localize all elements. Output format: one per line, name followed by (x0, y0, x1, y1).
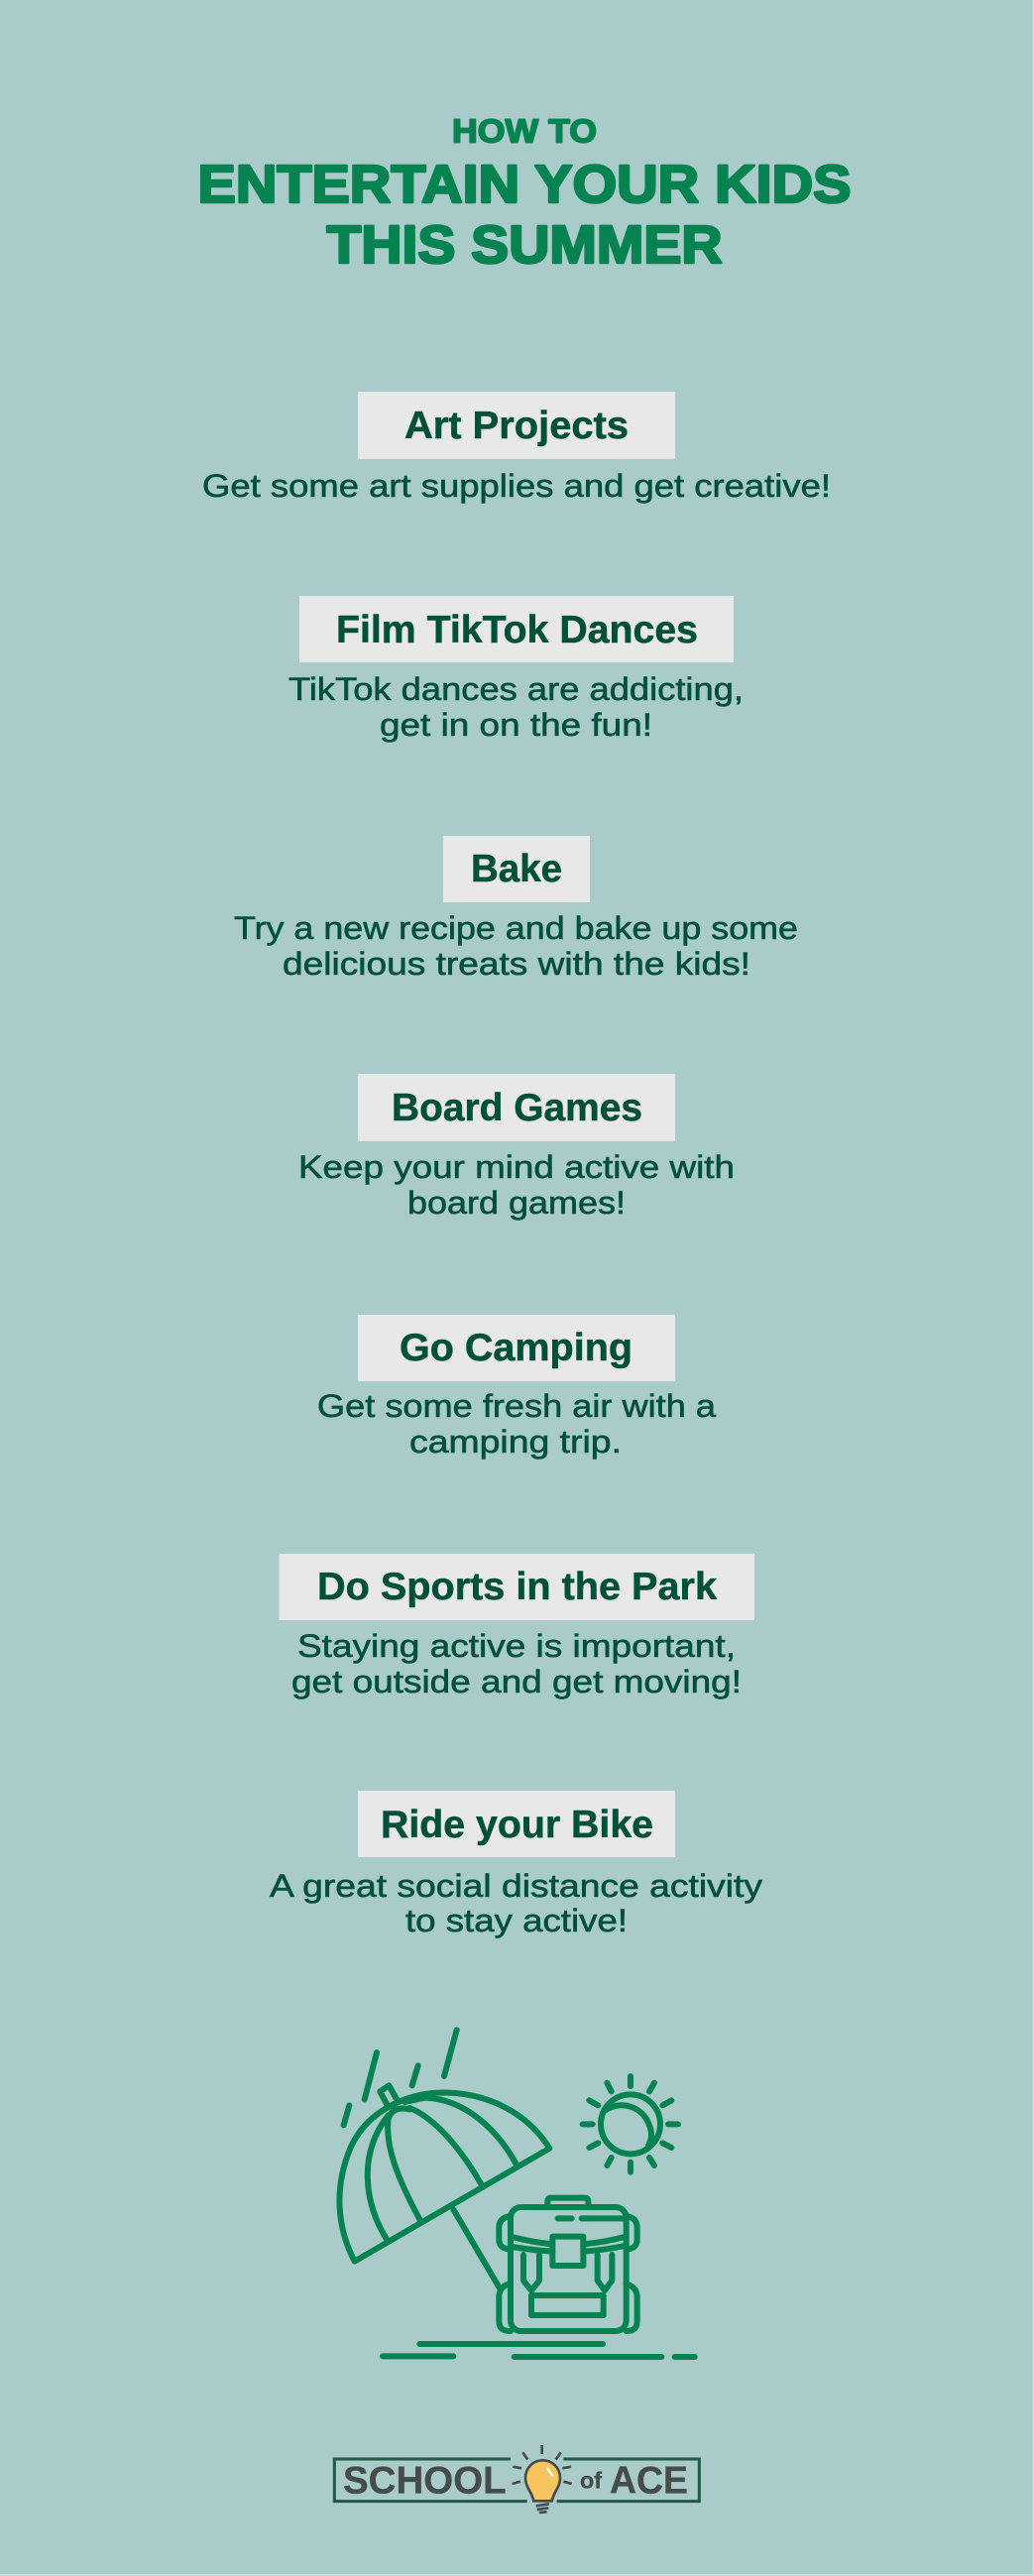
text: bike description: to stay active! (405, 1903, 628, 1938)
logo wordmark (343, 2459, 688, 2503)
item: film tiktok dances (288, 596, 744, 743)
heading: film tiktok dances: Film TikTok Dances (336, 609, 698, 651)
icon: sun (583, 2076, 678, 2172)
icon: rain drops (344, 2030, 457, 2125)
text: bake description: delicious treats with the kids! (283, 946, 750, 982)
heading: do sports in the park (280, 1554, 754, 1620)
heading: board games: Board Games (392, 1087, 642, 1129)
logo wordmark: of (580, 2467, 602, 2493)
text: tiktok description (288, 671, 744, 743)
text: sports description: Staying active is important, (297, 1628, 736, 1664)
heading: bake (443, 836, 590, 902)
heading: go camping (358, 1315, 675, 1381)
logo wordmark: SCHOOL (343, 2459, 507, 2503)
heading: film tiktok dances (299, 596, 734, 662)
heading: board games (358, 1074, 675, 1141)
text: sports description: get outside and get moving! (291, 1664, 742, 1699)
heading: art projects (358, 392, 675, 459)
icon: ground lines (383, 2344, 695, 2357)
item: bake (234, 836, 798, 982)
title (198, 113, 851, 275)
icon: umbrella (339, 2085, 549, 2287)
text: board games description: Keep your mind active with (298, 1149, 735, 1185)
text: art projects description: Get some art supplies and get creative! (202, 468, 831, 504)
text: board games description: board games! (407, 1185, 626, 1221)
text: tiktok description: TikTok dances are addicting, (288, 671, 744, 707)
text: bake description (234, 910, 798, 982)
text: sports description (291, 1628, 742, 1699)
icon: backpack (499, 2198, 637, 2331)
item: go camping (317, 1315, 717, 1460)
icon: light bulb (513, 2445, 572, 2513)
text: camping description: Get some fresh air with a (317, 1388, 717, 1424)
heading: ride your bike: Ride your Bike (381, 1804, 653, 1846)
text: bake description: Try a new recipe and bake up some (234, 910, 798, 946)
illustration: umbrella, sun and backpack (339, 2030, 695, 2357)
title: THIS SUMMER (327, 215, 722, 275)
heading: go camping: Go Camping (400, 1327, 632, 1369)
logo frame (334, 2459, 699, 2502)
heading: ride your bike (358, 1791, 675, 1857)
text: bike description (270, 1868, 763, 1938)
heading: art projects: Art Projects (404, 405, 629, 447)
item: ride your bike (270, 1791, 763, 1938)
item: art projects (202, 392, 831, 504)
title: ENTERTAIN YOUR KIDS (198, 155, 851, 214)
item: board games (298, 1074, 735, 1221)
text: camping description (317, 1388, 717, 1460)
text: board games description (298, 1149, 735, 1221)
title: HOW TO (452, 113, 597, 151)
logo: school of ace (334, 2445, 699, 2513)
text: tiktok description: get in on the fun! (380, 707, 652, 743)
heading: bake: Bake (471, 848, 562, 890)
heading: do sports in the park: Do Sports in the Park (317, 1566, 717, 1608)
logo wordmark: ACE (610, 2459, 688, 2503)
text: camping description: camping trip. (409, 1424, 622, 1460)
text: bike description: A great social distance activity (270, 1868, 763, 1904)
item: do sports in the park (280, 1554, 754, 1699)
